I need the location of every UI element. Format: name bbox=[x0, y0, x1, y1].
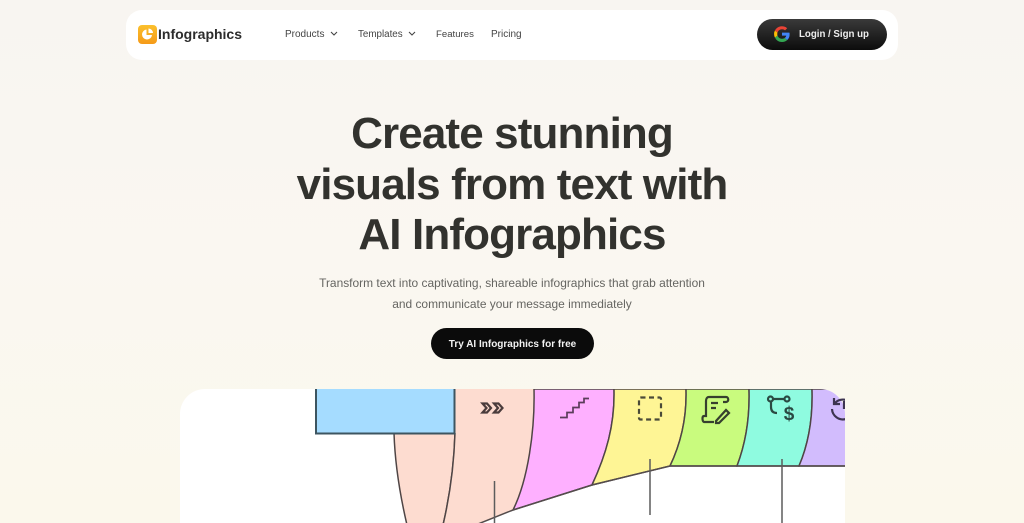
menu: Products: Products bbox=[285, 29, 324, 40]
leader line 3 bbox=[781, 459, 783, 523]
segment: pink bbox=[513, 389, 614, 510]
segment: green bbox=[670, 389, 749, 466]
panel: infographic preview bbox=[180, 389, 845, 523]
segment: peach lower bbox=[394, 433, 455, 523]
login label: Login / Sign up bbox=[799, 29, 869, 40]
panel background bbox=[180, 389, 845, 523]
segment outline: peach inner bbox=[443, 433, 455, 523]
segment: teal bbox=[737, 389, 812, 466]
icon: scroll and pencil bbox=[702, 397, 729, 423]
logo wordmark: Infographics bbox=[158, 26, 242, 42]
logo icon bbox=[138, 25, 157, 44]
segment: purple bbox=[799, 389, 846, 466]
funnel chart bbox=[316, 388, 846, 523]
icon: stairs bbox=[560, 398, 589, 418]
hero title: visuals from text with bbox=[297, 160, 727, 208]
funnel base line bbox=[478, 466, 846, 523]
icon: refresh alert bbox=[832, 398, 846, 419]
blue box bbox=[316, 388, 454, 434]
navigation bar bbox=[126, 10, 898, 60]
chevron: Templates bbox=[408, 32, 416, 36]
hero title: AI Infographics bbox=[358, 210, 666, 259]
hero subtitle: Transform text into captivating, shareable infographics that grab attention bbox=[319, 276, 705, 290]
menu: Templates: Templates bbox=[358, 29, 403, 40]
hero subtitle: and communicate your message immediately bbox=[392, 297, 632, 311]
icon: chevrons bbox=[482, 404, 502, 412]
call to action button: Try AI Infographics for free bbox=[449, 339, 576, 350]
menu: Features: Features bbox=[436, 29, 474, 40]
segment: peach bbox=[443, 389, 534, 523]
call to action button bbox=[431, 328, 594, 359]
menu: Pricing: Pricing bbox=[491, 29, 522, 40]
icon: dollar sign: $ bbox=[784, 404, 795, 425]
segment: yellow bbox=[592, 389, 686, 485]
leader line 2 bbox=[649, 459, 651, 515]
icon: Google G bbox=[774, 26, 790, 42]
leader line 1 bbox=[494, 481, 496, 523]
hero subtitle bbox=[319, 276, 705, 311]
icon: dashed square bbox=[639, 398, 661, 420]
login button bbox=[757, 19, 887, 50]
chevron: Products bbox=[330, 32, 338, 36]
icon: route and dollar bbox=[768, 396, 790, 413]
hero title: Create stunning bbox=[351, 109, 673, 158]
hero title bbox=[296, 109, 727, 259]
